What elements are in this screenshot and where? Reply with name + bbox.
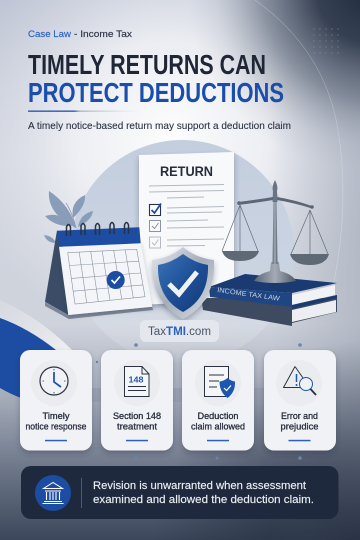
conclusion text bbox=[93, 480, 314, 506]
label: Error and bbox=[281, 411, 318, 421]
scale pole bbox=[272, 200, 278, 264]
calendar rings bbox=[66, 222, 128, 236]
accent line bbox=[45, 440, 67, 441]
brand pill bbox=[140, 320, 219, 342]
conclusion text: Revision is unwarranted when assessment bbox=[93, 480, 307, 492]
checkbox: second bbox=[150, 220, 160, 232]
backdrop circle bbox=[70, 140, 294, 364]
title bbox=[28, 49, 284, 108]
scale base bbox=[254, 262, 296, 283]
divider bbox=[80, 478, 83, 508]
icon: warning and magnifier bbox=[284, 366, 316, 395]
icon: document 148: 148 bbox=[128, 374, 144, 384]
panel: timely notice response bbox=[20, 350, 92, 450]
icon: shield bbox=[152, 247, 214, 319]
icon: scales of justice bbox=[222, 180, 329, 283]
document heading: RETURN bbox=[160, 164, 213, 179]
icon: institution bbox=[35, 475, 71, 511]
right pan bbox=[290, 210, 329, 265]
label: Deduction bbox=[198, 411, 238, 421]
title rule bbox=[28, 110, 143, 112]
accent line bbox=[126, 440, 148, 441]
brand pill: TaxTMI.com bbox=[148, 326, 211, 338]
icon: books bbox=[202, 274, 337, 326]
panel: section 148 treatment bbox=[101, 350, 173, 450]
checkbox: third bbox=[150, 237, 160, 248]
left pan bbox=[222, 205, 259, 261]
title: TIMELY RETURNS CAN bbox=[28, 49, 266, 80]
label: treatment bbox=[117, 422, 157, 432]
book title: INCOME TAX LAW bbox=[217, 287, 281, 303]
label: claim allowed bbox=[191, 422, 245, 432]
icon: leaves bbox=[44, 191, 93, 243]
checkbox: checked bbox=[150, 204, 161, 216]
conclusion text: examined and allowed the deduction claim. bbox=[93, 494, 314, 506]
calendar check badge bbox=[107, 271, 125, 289]
eyebrow: category label bbox=[28, 29, 132, 40]
panel: conclusion banner bbox=[21, 466, 338, 519]
upper book bbox=[209, 274, 337, 309]
eyebrow: category label: - Income Tax bbox=[74, 29, 132, 40]
label bbox=[280, 411, 318, 432]
scale beam bbox=[238, 197, 312, 208]
icon: return document bbox=[139, 152, 234, 305]
icon: clock bbox=[40, 367, 68, 395]
label bbox=[191, 411, 245, 432]
eyebrow: category label: Case Law bbox=[28, 29, 71, 40]
label: prejudice bbox=[280, 422, 318, 432]
icon: calendar bbox=[45, 222, 153, 319]
label bbox=[113, 411, 161, 432]
lower book bbox=[202, 298, 337, 326]
accent line bbox=[207, 440, 229, 441]
label: Timely bbox=[42, 411, 70, 421]
calendar grid bbox=[68, 249, 145, 304]
panel: deduction claim allowed bbox=[182, 350, 254, 450]
accent line bbox=[288, 440, 310, 441]
subtitle: A timely notice-based return may support a deduction claim bbox=[28, 121, 291, 132]
label bbox=[26, 411, 86, 432]
connector dots bbox=[96, 343, 302, 460]
label: Section 148 bbox=[113, 411, 161, 421]
decorative dot grid bbox=[313, 28, 339, 54]
blue swoosh bbox=[0, 318, 56, 400]
icon: document with shield bbox=[204, 366, 235, 398]
label: notice response bbox=[26, 422, 86, 432]
panel: error and prejudice bbox=[264, 350, 336, 450]
title: PROTECT DEDUCTIONS bbox=[28, 77, 284, 108]
